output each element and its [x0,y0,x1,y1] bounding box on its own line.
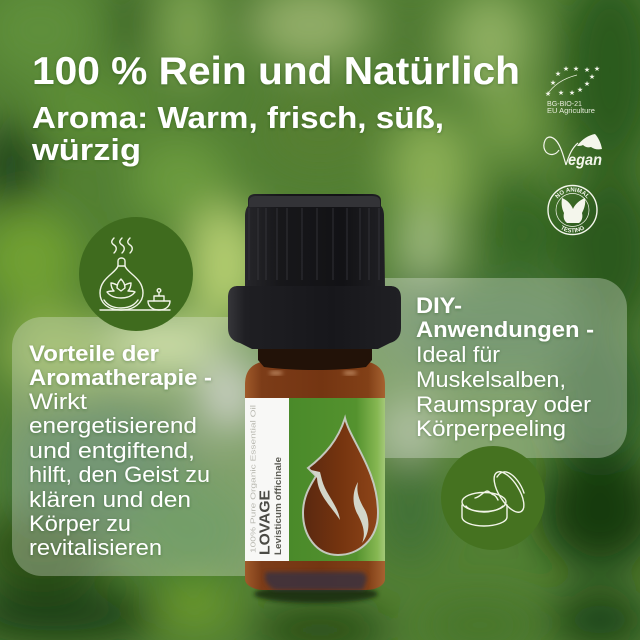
text: Vorteile der Aromatherapie: energetisierend [29,413,197,438]
cap top rim [249,196,380,207]
glass body [245,360,385,590]
badge: vegan: egan [568,152,602,169]
shoulder highlights [269,371,357,375]
label green [289,398,385,561]
cap ridges [249,208,379,280]
label text: Levisticum officinale [273,457,284,555]
black cap [245,194,385,287]
badge: EU organic: ★ [563,65,569,73]
badge: EU organic: ★ [594,65,600,73]
text: Vorteile der Aromatherapie: und entgiftend, [29,438,195,463]
cap collar [228,286,401,349]
badge: EU organic: BG-BIO-21 [547,99,582,108]
text: DIY-Anwendungen: Körperpeeling [416,416,566,441]
badge: EU organic: ★ [577,86,583,94]
icon: cream jar [441,446,545,550]
badge: no animal testing [547,184,598,236]
label white strip [245,398,290,561]
badge: EU organic: ★ [555,70,561,78]
text: Vorteile der Aromatherapie: Körper zu [29,511,131,536]
bottle base shade [265,572,367,590]
badge: EU organic: ★ [589,73,595,81]
badge: EU organic: ★ [569,89,575,97]
text: DIY-Anwendungen: Anwendungen - [416,317,594,342]
badge: EU organic: ★ [584,66,590,74]
text: DIY-Anwendungen: Ideal für [416,342,500,367]
text: Vorteile der Aromatherapie: hilft, den Geist zu [29,462,210,487]
badge: EU organic: ★ [545,90,551,98]
text: DIY-Anwendungen: Muskelsalben, [416,367,566,392]
subtitle: aroma: würzig [31,133,141,167]
panel: Vorteile der Aromatherapie background [12,317,302,576]
badge: no animal testing: NO ANIMAL [555,187,589,198]
text: DIY-Anwendungen: DIY- [416,293,462,318]
badge: vegan [544,134,602,169]
text: DIY-Anwendungen: Raumspray oder [416,392,591,417]
text: Vorteile der Aromatherapie: Aromatherapie - [29,365,212,390]
text: Vorteile der Aromatherapie: klären und den [29,487,191,512]
badge: EU organic: ★ [584,80,590,88]
text: Vorteile der Aromatherapie [29,341,212,560]
panel: DIY-Anwendungen background [340,278,627,458]
badge: EU organic: EU Agriculture [547,106,595,115]
text: Vorteile der Aromatherapie: Wirkt [29,389,87,414]
badge: EU organic [545,65,600,115]
icon: aroma diffuser [79,217,193,331]
badge: no animal testing: TESTING [562,225,584,232]
text: Vorteile der Aromatherapie: revitalisieren [29,535,162,560]
subtitle: aroma [31,101,444,167]
badge: EU organic: ★ [558,89,564,97]
label text: 100% Pure Organic Essential Oil [248,405,258,553]
label text [248,405,284,555]
bottle [228,194,401,603]
badge: EU organic: ★ [573,65,579,73]
label text: LOVAGE [256,490,274,555]
label drop [303,418,378,555]
badge: EU organic: ★ [550,79,556,87]
text: DIY-Anwendungen [416,293,594,441]
text: Vorteile der Aromatherapie: Vorteile der [29,341,159,366]
title: 100 % Rein und Natürlich [32,50,520,93]
subtitle: aroma: Aroma: Warm, frisch, süß, [32,101,444,135]
neck [258,346,372,370]
